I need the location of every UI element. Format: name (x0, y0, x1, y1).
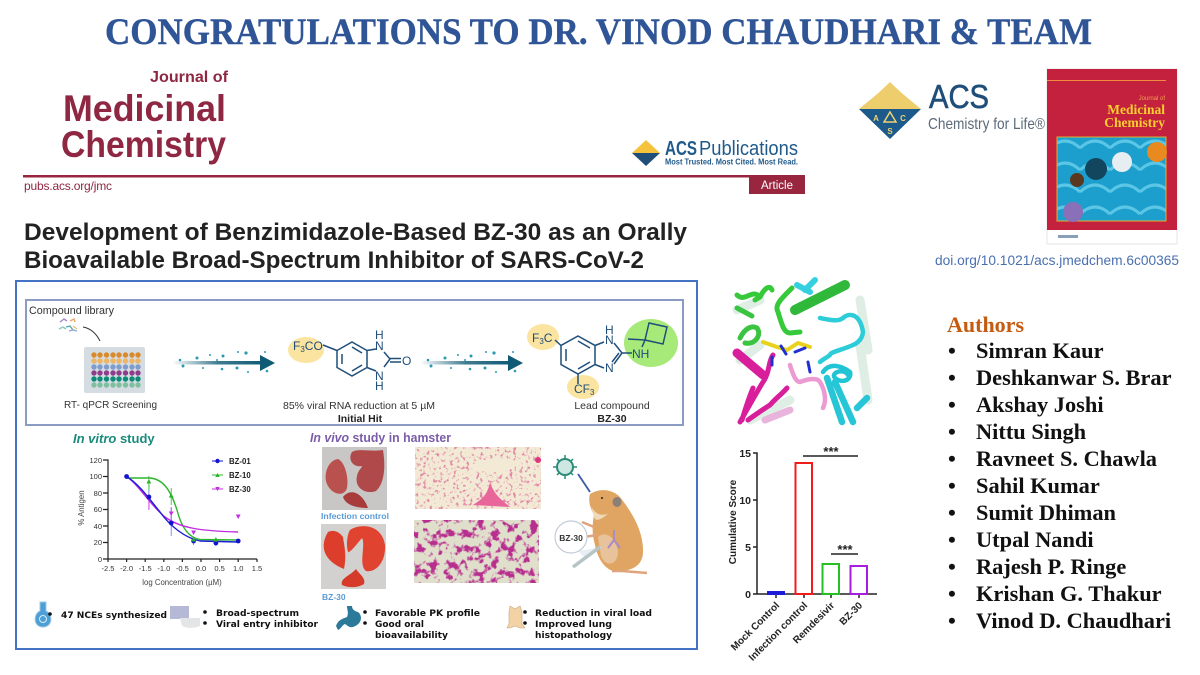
author names: • (948, 527, 956, 552)
chart: dose response: -2.0 (120, 564, 133, 573)
author names: • (948, 419, 956, 444)
chart: dose response: 20 (94, 538, 102, 547)
initial hit caption: Initial Hit (338, 413, 383, 425)
chart: dose response: log Concentration (µM) (142, 578, 222, 587)
chart: cumulative score: 15 (739, 448, 751, 460)
lead compound caption (574, 400, 650, 425)
authors list (947, 312, 1172, 633)
ACS Publications logo: ACS (665, 138, 697, 160)
label: infection control: Infection control (321, 511, 389, 521)
initial hit molecule: H (375, 328, 384, 342)
header rule (23, 175, 805, 178)
ACS logo: S (887, 127, 893, 136)
chart: dose response: 1.5 (252, 564, 262, 573)
initial hit molecule: N (375, 369, 384, 383)
chart: dose response: -0.5 (176, 564, 189, 573)
author names: Nittu Singh (976, 419, 1087, 444)
author names: Sumit Dhiman (976, 500, 1117, 525)
icon: swab (578, 474, 590, 492)
lead compound caption: Lead compound (574, 400, 650, 412)
author names: Ravneet S. Chawla (976, 446, 1157, 471)
paper headline: Bioavailable Broad-Spectrum Inhibitor of SARS-CoV-2 (24, 247, 644, 274)
author names: Simran Kaur (976, 338, 1104, 363)
bullet: 47 NCEs (35, 602, 167, 627)
ACS logo: ACS (929, 78, 989, 115)
chart: cumulative score: 5 (745, 542, 751, 554)
initial hit molecule: H (375, 379, 384, 393)
bullet: viral load: Reduction in viral load (535, 609, 652, 619)
icon: syringe (573, 547, 600, 567)
lead compound molecule: 3 (590, 388, 595, 397)
chart: cumulative score: Mock Control (729, 600, 782, 653)
author names: • (948, 608, 956, 633)
initial hit molecule: O (402, 354, 411, 368)
chart: dose response: -1.5 (139, 564, 152, 573)
arrow: screening to initial hit (172, 351, 275, 373)
chart: cumulative score: Infection control (747, 600, 810, 664)
journal logo (61, 69, 229, 165)
journal cover: Medicinal (1107, 102, 1165, 117)
initial hit molecule (288, 328, 411, 393)
in vitro heading: In vitro study (73, 431, 155, 446)
author names: Utpal Nandi (976, 527, 1094, 552)
chart: dose response: 0 (98, 555, 102, 564)
lead compound molecule: NH (632, 347, 649, 361)
photo: treated lungs (321, 524, 386, 589)
author names (948, 338, 1172, 633)
bullet: spectrum: Broad-spectrum (216, 609, 299, 619)
ACS Publications logo (632, 138, 798, 166)
chart: dose response (77, 456, 262, 587)
ACS logo: A (873, 114, 879, 123)
in vivo heading: In vivo study in hamster (310, 430, 451, 445)
initial hit molecule: 3 (300, 345, 305, 354)
chart: cumulative score: 0 (745, 589, 751, 601)
lead compound molecule: C (544, 331, 553, 345)
icon: flask (35, 602, 51, 627)
author names: Rajesh P. Ringe (976, 554, 1126, 579)
journal logo: Medicinal (63, 88, 226, 129)
chart: dose response: 1.0 (233, 564, 243, 573)
chart: dose response: 60 (94, 505, 102, 514)
DOI: doi.org/10.1021/acs.jmedchem.6c00365 (935, 253, 1179, 268)
lead compound molecule: CF (574, 382, 590, 396)
journal logo: Chemistry (61, 124, 226, 165)
title: CONGRATULATIONS TO DR. VINOD CHAUDHARI & TEAM (105, 12, 1092, 53)
journal url: pubs.acs.org/jmc (24, 179, 112, 193)
icon: virus (553, 455, 577, 479)
chart: dose response: 0.0 (196, 564, 206, 573)
chart: dose response: 100 (89, 472, 102, 481)
icon: compound molecules (59, 319, 77, 331)
chart: cumulative score: *** (837, 542, 854, 557)
histology: infection control (415, 447, 541, 509)
initial hit caption (283, 400, 435, 425)
chart: cumulative score: Remdesivir (791, 600, 837, 646)
chart: cumulative score (728, 444, 877, 664)
lead compound caption: BZ-30 (597, 413, 627, 425)
icon: assay instrument (170, 606, 200, 628)
chart: cumulative score: Cumulative Score (728, 479, 739, 564)
bullet: spectrum (170, 606, 319, 630)
panel: graphical abstract (16, 281, 697, 649)
bullet: viral load: Improved lung (535, 620, 612, 630)
BZ-30 callout: BZ-30 (559, 533, 583, 543)
author names: • (948, 338, 956, 363)
illustration: hamster infection and dosing (553, 455, 647, 573)
screening label: RT- qPCR Screening (64, 399, 157, 411)
lead compound molecule: H (605, 323, 614, 337)
paper headline (24, 219, 687, 274)
journal cover: Journal of (1139, 96, 1165, 102)
author names: Deshkanwar S. Brar (976, 365, 1172, 390)
icon: hamster skin (507, 606, 525, 628)
bullet: PK profile: bioavailability (375, 631, 448, 641)
initial hit caption: 85% viral RNA reduction at 5 µM (283, 400, 435, 412)
lead compound molecule: F (532, 331, 539, 345)
author names: • (948, 473, 956, 498)
lead compound molecule: N (605, 361, 614, 375)
bullet: 47 NCEs: 47 NCEs synthesized (61, 611, 167, 621)
chart: dose response: 80 (94, 489, 102, 498)
chart legend (212, 457, 251, 494)
authors heading: Authors (947, 312, 1024, 337)
journal cover: Chemistry (1104, 115, 1165, 130)
paper headline: Development of Benzimidazole-Based BZ-30 as an Orally (24, 219, 687, 246)
arrow: library to plate (83, 327, 100, 341)
lead compound molecule (527, 319, 678, 399)
chart: cumulative score: 10 (739, 495, 751, 507)
arrow: initial hit to lead (420, 351, 523, 373)
chart: dose response: 120 (89, 456, 102, 465)
initial hit molecule: CO (305, 339, 323, 353)
compound library label: Compound library (29, 305, 114, 317)
lead compound molecule: N (605, 333, 614, 347)
initial hit molecule: F (293, 339, 300, 353)
author names: • (948, 365, 956, 390)
bullet: spectrum: Viral entry inhibitor (216, 620, 319, 630)
bullet: PK profile: Good oral (375, 620, 424, 630)
hamster body (582, 490, 647, 573)
ACS logo: Chemistry for Life® (928, 116, 1045, 133)
journal cover (1047, 69, 1177, 244)
chart: dose response: % Antigen (77, 490, 86, 526)
author names: • (948, 500, 956, 525)
panel: discovery workflow (26, 300, 683, 425)
chart: dose response: -1.0 (157, 564, 170, 573)
author names: Sahil Kumar (976, 473, 1100, 498)
author names: • (948, 446, 956, 471)
author names: Vinod D. Chaudhari (976, 608, 1171, 633)
journal logo: Journal of (150, 69, 229, 86)
bullet: PK profile (336, 606, 480, 641)
lead compound molecule: 3 (539, 337, 544, 346)
photo: infected lungs (322, 447, 387, 510)
author names: • (948, 554, 956, 579)
icon: screening plate (84, 347, 145, 393)
chart: cumulative score: *** (823, 444, 840, 459)
author names: Krishan G. Thakur (976, 581, 1162, 606)
chart: cumulative score: BZ-30 (838, 600, 865, 628)
ACS logo (859, 78, 1045, 139)
chart: dose response: 40 (94, 522, 102, 531)
histology: BZ-30 (414, 520, 539, 583)
bullet: PK profile: Favorable PK profile (375, 609, 480, 619)
article badge (749, 176, 805, 194)
chart: dose response: -2.5 (102, 564, 114, 573)
author names: • (948, 392, 956, 417)
chart: dose response: 0.5 (214, 564, 225, 573)
chart legend: BZ-10 (229, 471, 251, 480)
author names: Akshay Joshi (976, 392, 1104, 417)
chart legend: BZ-01 (229, 457, 251, 466)
article badge: Article (761, 180, 793, 192)
protein structure (737, 280, 868, 422)
ACS Publications logo: Most Trusted. Most Cited. Most Read. (665, 158, 798, 166)
bullet: viral load (507, 606, 652, 641)
ACS logo: C (900, 114, 906, 123)
chart legend: BZ-30 (229, 485, 251, 494)
author names: • (948, 581, 956, 606)
icon: stomach (336, 606, 361, 630)
initial hit molecule: N (375, 339, 384, 353)
bullet: viral load: histopathology (535, 631, 612, 641)
ACS Publications logo: Publications (699, 138, 798, 160)
label: BZ-30 lungs: BZ-30 (322, 592, 346, 602)
